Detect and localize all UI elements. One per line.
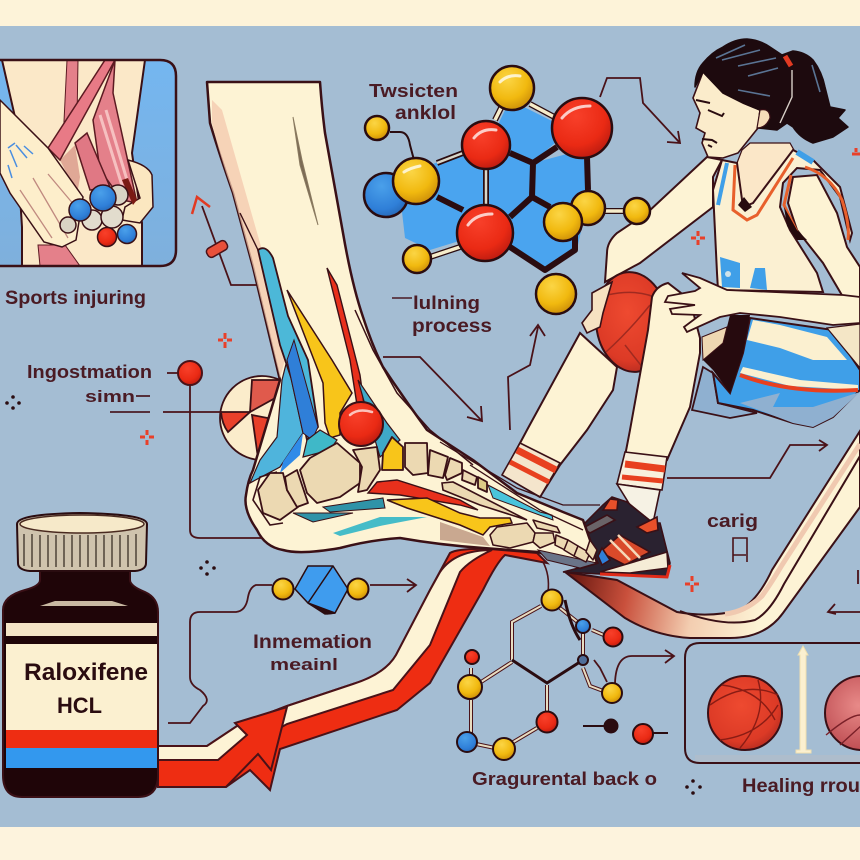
leg and foot outline (207, 82, 597, 568)
face (693, 72, 760, 158)
sock far (502, 443, 560, 497)
hair tie (785, 56, 791, 66)
top cream band (0, 0, 860, 26)
bonds light (471, 606, 606, 748)
shorts (713, 318, 860, 427)
blue stripe (6, 748, 157, 768)
icon: red sparkle (218, 333, 232, 348)
label: healing progress: Healing rrou (742, 776, 860, 797)
tendon teal long (258, 248, 318, 440)
forearm and hand (665, 273, 860, 332)
shin pink shading (212, 100, 285, 378)
icon: red sparkle lower (140, 430, 154, 445)
heel ring (253, 472, 283, 525)
sole grey texture (440, 522, 490, 546)
blue hexagon fills (402, 100, 590, 268)
icon: dark dots center (199, 560, 216, 576)
healing arrow (796, 646, 811, 753)
shin far leg (503, 333, 617, 497)
connector arrow (594, 650, 674, 683)
arrowhead: red ribbon head (158, 707, 287, 787)
icon: red sparkle right (685, 576, 699, 592)
shoulder and upper arm (788, 175, 860, 297)
hair and ponytail (695, 39, 848, 143)
healing ball red (708, 676, 782, 750)
bottle cap (17, 513, 147, 571)
bond dark (512, 600, 583, 683)
connector left (168, 585, 272, 723)
connector to small atom (390, 132, 414, 160)
illustration: injured athlete (502, 39, 860, 577)
jersey number (720, 257, 767, 290)
label: healing process: process (412, 316, 492, 337)
forefoot grey underside (538, 550, 597, 568)
label: twisted ankle (369, 81, 458, 124)
teal piece above talus (303, 430, 337, 457)
label: ingestion simulation: simn (85, 387, 135, 406)
shorts grey lower (692, 367, 757, 418)
dark teal strip (293, 513, 353, 522)
arch yellow band (387, 498, 512, 535)
healing ball pink (825, 676, 860, 750)
shin streak shadow (293, 117, 318, 225)
arrow: up to molecule (508, 325, 545, 430)
illustration: leg and ankle anatomy (207, 82, 600, 568)
inner leg line right (355, 310, 473, 465)
icon: injury molecule cluster (60, 185, 136, 246)
arrow: right of sock (667, 440, 827, 478)
icon: red sparkle near jersey (691, 231, 705, 245)
red stripe (6, 730, 157, 748)
blue patch at heel (280, 433, 303, 473)
arrow: toward healing panel (828, 570, 860, 614)
label: healing process (392, 293, 492, 337)
dose: HCL (57, 693, 102, 718)
shadow beneath thigh (703, 315, 750, 393)
arch red band (368, 480, 478, 510)
ball on knee (591, 269, 673, 375)
connector: red node to heel (163, 361, 262, 538)
near sock (617, 452, 667, 523)
forefoot bones (490, 520, 597, 562)
arrow: down to foot (383, 357, 482, 421)
near leg (625, 283, 700, 460)
jersey neck trim (733, 158, 793, 220)
panel: healing progress (685, 643, 860, 763)
molecule: top hexagon structure (364, 66, 650, 314)
inner leg line left (240, 213, 258, 250)
arm reaching (605, 157, 722, 282)
heel bone (258, 437, 487, 520)
arrow: red pointer to inset (192, 197, 258, 285)
forefoot teal (488, 485, 553, 520)
label panel (6, 644, 157, 730)
bottle body (3, 565, 158, 797)
shoe (563, 497, 670, 577)
arrow: to athlete head (600, 78, 680, 143)
molecule: lower chain (457, 562, 674, 760)
tendon yellow (287, 290, 352, 438)
bonds outlined (471, 606, 606, 748)
bottle shine (40, 601, 128, 606)
eye, brow and mouth (696, 100, 724, 147)
molecule: mid hexagon connector (168, 566, 416, 723)
icon: bruised ball at ankle (220, 376, 304, 460)
label: inflammation mechanism: meainl (270, 655, 338, 674)
label: inflammation mechanism: Inmemation (253, 632, 372, 653)
label cream stripe (6, 623, 157, 636)
tendon red stem (327, 268, 364, 405)
ribbon: red path from bottle to foot (158, 549, 547, 790)
left hand on ball (582, 282, 612, 333)
bonds dark (437, 147, 588, 270)
label: caring: carig (707, 511, 758, 531)
icon: dark dots left (5, 395, 21, 410)
icon: red sparkle edge (852, 148, 860, 154)
label: gragurental back: Gragurental back o (472, 769, 657, 789)
forefoot top lines (440, 442, 600, 530)
red tendon ball (339, 402, 383, 446)
icon: caring door (733, 538, 747, 562)
connector right arrow (370, 579, 416, 592)
shorts stripes (747, 320, 847, 360)
jersey (713, 150, 852, 292)
label: ingestion simulation: Ingostmation (27, 362, 152, 382)
label: inflammation mechanism (253, 632, 372, 674)
hair highlights (716, 45, 820, 96)
label: ingestion simulation (27, 362, 152, 412)
teal band right of ankle (358, 380, 400, 457)
shoulder dark gap (784, 207, 807, 240)
label: twisted ankle: Twsicten (369, 81, 458, 101)
label: twisted ankle: anklol (395, 103, 456, 124)
ear (757, 110, 770, 128)
bonds light (430, 104, 625, 257)
blue hexagon (295, 566, 348, 614)
ribbon: cream path under shoe rising right (565, 431, 860, 638)
label: healing process: lulning (413, 293, 480, 313)
soft teal band (333, 517, 427, 536)
atoms (364, 66, 650, 314)
connector from foot (543, 562, 548, 592)
teal strip under bones (323, 498, 385, 512)
panel: sports injury inset (0, 60, 176, 266)
product name: Raloxifene (24, 659, 148, 686)
single atoms (583, 720, 668, 744)
atom highlights (404, 76, 590, 225)
hair line (780, 70, 792, 123)
jersey drape (827, 324, 860, 368)
tendon dark blue (287, 340, 318, 440)
bottle: raloxifene (3, 513, 158, 797)
icon: dark dots bottom (685, 779, 702, 795)
forefoot long bone (442, 482, 527, 520)
atoms (457, 590, 622, 760)
back of thigh skin (702, 327, 727, 360)
label: sports injuring: Sports injuring (5, 288, 146, 309)
bottom cream band (0, 827, 860, 860)
tendon light blue (250, 360, 303, 483)
neck (737, 143, 795, 207)
